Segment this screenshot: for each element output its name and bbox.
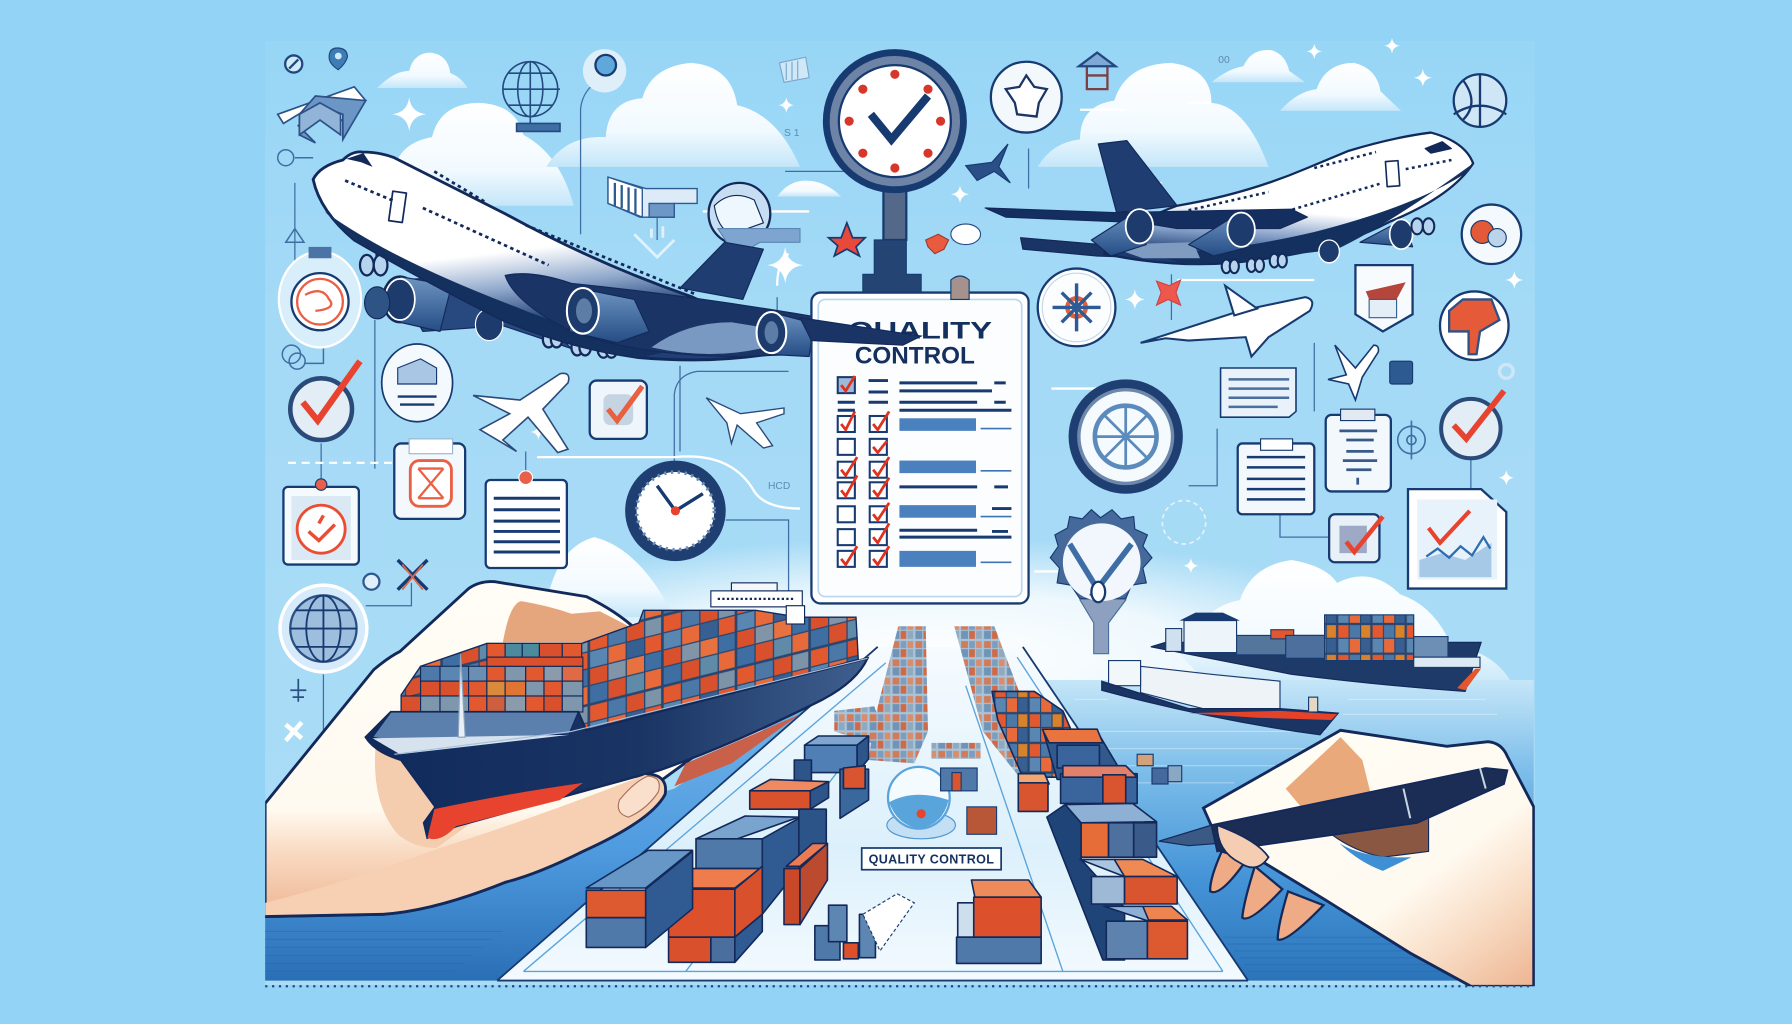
small labels <box>768 55 1230 492</box>
mast <box>458 654 465 737</box>
engines <box>567 288 814 357</box>
gauge: quality inspection dial <box>823 49 967 304</box>
icon: ship badge <box>1355 265 1413 331</box>
icon: check tile right <box>1329 514 1383 562</box>
small labels: 00 <box>1218 55 1230 66</box>
cockpit and windows <box>346 153 406 223</box>
icon: globe top right <box>1454 74 1506 128</box>
icon: location pin <box>329 48 347 70</box>
container: large orange <box>669 866 762 962</box>
near wing <box>505 274 921 357</box>
stack far <box>794 736 869 818</box>
far wing and engines <box>365 277 571 349</box>
icon: network globe bottom left <box>280 585 367 672</box>
near wing <box>985 208 1307 229</box>
icon: red cross clipboard <box>394 439 465 519</box>
icon: small plane left <box>473 373 569 453</box>
icon: small plane right <box>1328 345 1378 400</box>
panel: illustration sky <box>265 41 1535 985</box>
icon: red star right <box>1157 280 1181 305</box>
clip knob <box>951 276 969 299</box>
palm shadow <box>375 749 470 848</box>
belly shadow <box>1143 163 1473 265</box>
left hand holding ship <box>265 582 867 917</box>
small boxes <box>815 905 875 960</box>
icon: speech bubble with star <box>926 224 981 254</box>
icon: barcode tag <box>779 57 809 82</box>
icon: gear gauge on stand <box>1050 510 1152 654</box>
container: back blue <box>696 809 826 914</box>
airplane: right jumbo <box>985 133 1473 273</box>
belly shadow <box>325 211 697 358</box>
landing gear <box>1222 218 1434 273</box>
icon: compass outline <box>1398 421 1425 459</box>
icon: stamped circle <box>279 247 361 347</box>
containers: left yard stacks <box>586 736 875 962</box>
chart: report with trend line <box>1408 489 1506 589</box>
icon: check badge left <box>290 361 360 440</box>
network lines <box>295 80 1474 731</box>
icon: wheel gauge <box>1069 379 1183 494</box>
clipboard: quality control checklist <box>811 276 1029 603</box>
engines <box>1091 209 1413 263</box>
icon: red harness circle <box>1440 291 1509 360</box>
hull <box>366 658 867 838</box>
dashed ramp <box>863 894 914 951</box>
icon: interlocked rings <box>282 345 323 369</box>
icon: small jet silhouette <box>966 144 1010 183</box>
fuselage <box>313 152 768 360</box>
index finger <box>1217 825 1269 867</box>
icon: check badge right <box>1441 391 1504 458</box>
checklist rows <box>838 376 1011 567</box>
container row: bottom pair <box>1104 906 1187 959</box>
icon: document circle <box>382 344 453 422</box>
icon: star circle <box>991 62 1062 133</box>
cockpit and windows <box>1425 142 1451 153</box>
icon: large plane white <box>1141 286 1312 357</box>
container: left orange over blue <box>586 850 693 947</box>
bow containers <box>401 643 583 712</box>
icon: text card right <box>1221 368 1296 417</box>
horizon glow <box>423 537 1429 777</box>
icon: compass gear badge <box>1038 269 1115 346</box>
quay: container yard <box>497 626 1248 981</box>
far wing <box>1021 238 1166 258</box>
icon: crossed check <box>634 226 674 257</box>
finger shadow <box>1286 737 1371 809</box>
right hand writing <box>1159 730 1534 986</box>
icon: small plane mid <box>706 398 784 448</box>
thumb <box>265 774 666 917</box>
sparkles <box>392 38 1523 574</box>
red keel <box>427 783 583 839</box>
icon: small gauge top left <box>285 55 302 73</box>
containers: right yard stacks <box>957 691 1187 963</box>
lower fingers <box>1210 851 1323 940</box>
container: orange low <box>1018 774 1049 811</box>
far container rows <box>869 626 928 763</box>
icon: cargo scanner <box>608 177 697 217</box>
ship: left container ship <box>366 583 867 839</box>
icon: hangar <box>278 87 366 143</box>
label: quality control <box>862 848 1001 870</box>
icon: wire globe <box>503 62 560 131</box>
upper stack <box>992 691 1126 779</box>
hull reflection <box>674 714 800 786</box>
pen <box>1159 768 1507 851</box>
label: quality control: QUALITY CONTROL <box>869 852 994 866</box>
globe on quay <box>887 767 955 839</box>
landing gear <box>360 246 617 358</box>
row: mixed <box>1061 766 1137 803</box>
icon: marine gear circle <box>1462 205 1521 264</box>
container: orange top <box>750 779 829 809</box>
container row: orange blue navy <box>1065 803 1157 857</box>
ship: right container ship <box>1151 613 1481 691</box>
icon: house <box>1079 53 1115 89</box>
palm gap <box>1331 814 1429 857</box>
airplane wing tip over clipboard <box>800 318 921 345</box>
hand palm <box>265 582 697 917</box>
airplane: left jumbo <box>313 152 921 360</box>
container stacks <box>401 610 858 734</box>
container row: blue orange <box>1080 859 1177 904</box>
icon: top pin badge <box>583 49 626 93</box>
icon: clipboard list <box>1326 409 1391 491</box>
navy wall <box>1047 805 1125 960</box>
icon: left column symbol <box>278 150 313 242</box>
footer dotted line <box>265 985 1534 987</box>
icon: small cog <box>1499 365 1513 378</box>
icon: red check tag <box>283 479 359 565</box>
icon: text document <box>486 471 567 568</box>
icon: check box tile <box>590 381 647 439</box>
hand back <box>1203 730 1534 986</box>
icon: text document right <box>1238 439 1314 514</box>
icon: clock <box>625 461 726 561</box>
clouds <box>377 50 1514 688</box>
small labels: HCD <box>768 481 790 492</box>
superstructure <box>711 583 805 624</box>
tail fin <box>1098 141 1177 213</box>
subtitle: CONTROL <box>855 342 975 369</box>
thumbnail <box>618 776 659 817</box>
icon: dashed seal <box>1162 501 1206 544</box>
water left <box>265 654 878 981</box>
fuselage <box>1104 133 1473 264</box>
water right <box>1011 680 1534 981</box>
foredeck <box>374 712 578 738</box>
container: tall red stack <box>784 843 827 925</box>
title: QUALITY <box>848 317 992 344</box>
small labels: S 1 <box>784 128 800 139</box>
icon: crossed tools <box>363 560 427 590</box>
underside panel <box>1104 242 1200 258</box>
icon: side marks <box>286 679 306 741</box>
tail fin with globe <box>680 183 800 299</box>
icon: red star <box>829 223 865 256</box>
container: front orange over blue <box>957 880 1041 963</box>
small container cluster <box>941 768 997 834</box>
finger shadow <box>503 601 635 642</box>
ship: lower barge <box>1102 661 1338 735</box>
icon: small device <box>1390 361 1413 384</box>
small boxes floating on water <box>1137 754 1182 784</box>
